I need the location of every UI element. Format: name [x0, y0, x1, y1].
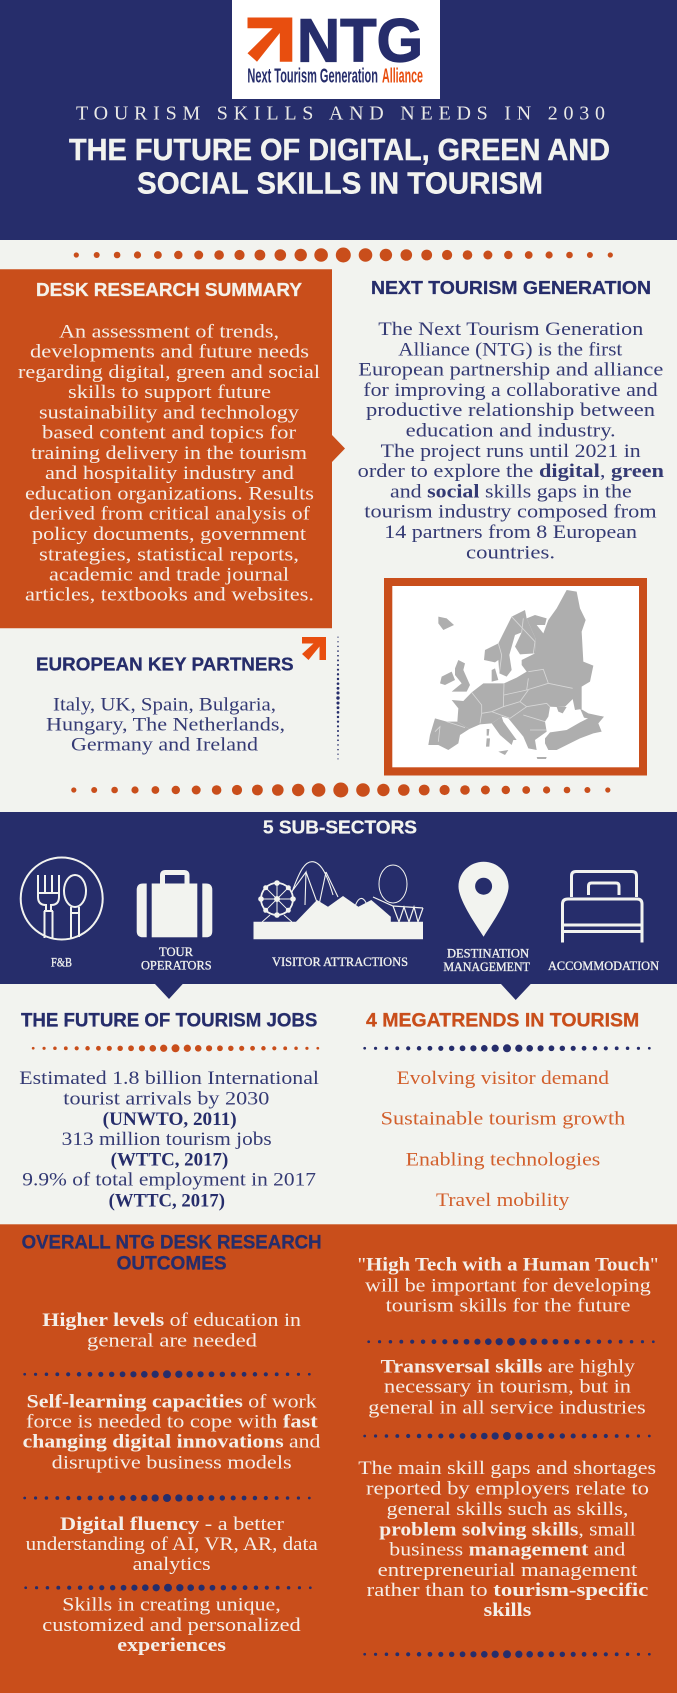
outcome: skill gaps: entrepreneurial management — [378, 1561, 638, 1581]
dot divider — [363, 1044, 651, 1052]
heading: OUTCOMES — [117, 1252, 227, 1274]
label: tour operators: TOUR — [159, 945, 194, 959]
text block: tourism industry composed from — [364, 503, 657, 523]
text block: Alliance (NTG) is the first — [398, 340, 623, 360]
outcome: self-learning: Self-learning capacities of work — [27, 1392, 318, 1412]
outcome: transversal skills: general in all service industries — [368, 1398, 646, 1418]
text block: (UNWTO, 2011) — [103, 1110, 237, 1130]
panel: 4 megatrends — [363, 1010, 651, 1211]
vertical dot divider — [336, 637, 340, 759]
outcome: transversal skills: Transversal skills are highly — [381, 1358, 636, 1378]
label: tour operators: OPERATORS — [141, 958, 212, 972]
text block: Estimated 1.8 billion International — [19, 1069, 319, 1089]
outcome: skill gaps: problem solving skills , small — [379, 1520, 636, 1540]
text block: education and industry. — [406, 422, 616, 442]
icon: location pin — [458, 862, 509, 937]
text block — [381, 1069, 625, 1211]
outcome: skill gaps: The main skill gaps and shortages — [358, 1459, 656, 1479]
text block: strategies, statistical reports, — [39, 545, 299, 565]
outcome: high tech: "High Tech with a Human Touch " — [358, 1256, 658, 1276]
central europe — [452, 672, 573, 750]
text block: Evolving visitor demand — [397, 1069, 610, 1089]
text block: 313 million tourism jobs — [62, 1130, 272, 1150]
label: visitor attractions: VISITOR ATTRACTIONS — [272, 955, 408, 969]
turkey — [545, 716, 604, 750]
outcome: unique skills: Skills in creating unique, — [62, 1596, 281, 1616]
panel: 5 sub-sectors — [0, 812, 677, 1000]
text block: Germany and Ireland — [71, 736, 259, 756]
text block — [358, 320, 665, 563]
panel: next tourism generation — [358, 277, 665, 563]
text block: and social skills gaps in the — [390, 482, 632, 502]
text block: productive relationship between — [366, 401, 655, 421]
outcome: skill gaps: business management and — [389, 1541, 626, 1561]
title: THE FUTURE OF DIGITAL, GREEN AND — [69, 133, 610, 167]
dot divider top — [74, 248, 613, 262]
panel: european key partners — [36, 637, 326, 756]
text block — [19, 1069, 319, 1212]
outcome: transversal skills: necessary in tourism, but in — [384, 1378, 631, 1398]
label: tour operators — [141, 945, 212, 972]
outcome: higher levels: general are needed — [87, 1332, 258, 1352]
subtitle: TOURISM SKILLS AND NEEDS IN 2030 — [76, 102, 605, 124]
heading: EUROPEAN KEY PARTNERS — [36, 654, 294, 675]
caucasus — [580, 708, 603, 720]
outcome: self-learning: disruptive business models — [52, 1453, 292, 1473]
denmark — [492, 668, 498, 682]
logo letters: NTG — [297, 7, 423, 75]
dot divider — [363, 1650, 651, 1658]
heading: DESK RESEARCH SUMMARY — [36, 279, 303, 300]
text block: sustainability and technology — [39, 403, 300, 423]
scandinavia — [484, 610, 527, 677]
dot divider middle — [71, 782, 610, 798]
icon: bed — [562, 872, 642, 942]
dot divider — [32, 1044, 319, 1052]
heading: 5 SUB-SECTORS — [263, 816, 417, 837]
text block: articles, textbooks and websites. — [25, 586, 314, 606]
outcome: high tech — [358, 1256, 658, 1317]
text block: for improving a collaborative and — [363, 381, 659, 401]
text block: developments and future needs — [30, 342, 309, 362]
text block: The Next Tourism Generation — [378, 320, 643, 340]
label: destination management — [443, 947, 530, 974]
dot divider — [23, 1370, 311, 1378]
heading: NEXT TOURISM GENERATION — [371, 277, 651, 298]
outcome: digital fluency: Digital fluency - a better — [60, 1515, 284, 1535]
heading — [22, 1231, 322, 1274]
text block: education organizations. Results — [25, 484, 314, 504]
italy — [492, 717, 517, 745]
finland — [515, 613, 535, 654]
iberia — [428, 718, 469, 750]
title — [69, 133, 610, 200]
outcome: unique skills: experiences — [117, 1636, 226, 1656]
heading: OVERALL NTG DESK RESEARCH — [22, 1231, 322, 1253]
text block: Travel mobility — [436, 1191, 570, 1211]
label: F&B: F&B — [51, 956, 72, 970]
logo tagline: Next Tourism Generation — [247, 66, 378, 88]
label: destination management: MANAGEMENT — [443, 960, 530, 974]
iceland — [438, 617, 454, 630]
dot divider — [363, 1432, 651, 1440]
icon: logo arrow — [248, 18, 292, 62]
text block: academic and trade journal — [49, 566, 289, 586]
text block: Italy, UK, Spain, Bulgaria, — [53, 696, 276, 716]
text block: 14 partners from 8 European — [384, 523, 637, 543]
text block: policy documents, government — [32, 525, 307, 545]
text block: skills to support future — [68, 383, 271, 403]
outcome: high tech: will be important for developing — [365, 1277, 651, 1297]
label: destination management: DESTINATION — [447, 947, 529, 961]
icon: amusement park — [254, 862, 423, 939]
text block: The project runs until 2021 in — [381, 442, 641, 462]
icon: suitcase — [137, 872, 212, 937]
icon: arrow — [302, 637, 326, 660]
outcome: skill gaps: reported by employers relate to — [366, 1479, 649, 1499]
outcome: unique skills: customized and personalized — [42, 1616, 302, 1636]
text block — [18, 322, 320, 606]
panel: map of Europe — [384, 578, 647, 776]
outcome: skill gaps — [358, 1459, 656, 1621]
logo — [232, 0, 440, 99]
britain — [452, 660, 470, 692]
label: accommodation: ACCOMMODATION — [548, 959, 659, 973]
sicily — [498, 750, 508, 755]
map — [428, 590, 604, 759]
heading: 4 MEGATRENDS IN TOURISM — [366, 1010, 639, 1032]
text block — [46, 696, 285, 756]
text block: (WTTC, 2017) — [109, 1192, 225, 1212]
outcome: skill gaps: skills — [484, 1601, 531, 1621]
outcome: digital fluency: analytics — [133, 1555, 211, 1575]
text block: and hospitality industry and — [45, 464, 295, 484]
panel: desk research summary — [0, 269, 345, 628]
text block: Enabling technologies — [406, 1151, 600, 1171]
outcome: self-learning — [23, 1392, 321, 1473]
text block: based content and topics for — [42, 424, 296, 444]
outcome: higher levels — [42, 1311, 301, 1352]
dot divider — [23, 1494, 311, 1502]
dot divider — [367, 1338, 655, 1346]
panel: header — [0, 0, 677, 240]
text block: Hungary, The Netherlands, — [46, 716, 285, 736]
text block: countries. — [466, 543, 555, 563]
crimea — [557, 707, 567, 713]
text block: Sustainable tourism growth — [381, 1109, 625, 1129]
panel: future of tourism jobs — [19, 1010, 319, 1212]
crete — [537, 757, 547, 759]
outcome: skill gaps: rather than to tourism-specific — [367, 1581, 648, 1601]
outcome: digital fluency: understanding of AI, VR, AR, data — [26, 1535, 318, 1555]
text block: tourist arrivals by 2030 — [63, 1089, 269, 1109]
corsica — [487, 729, 489, 736]
outcome: higher levels: Higher levels of education in — [42, 1311, 301, 1331]
outcome: high tech: tourism skills for the future — [386, 1297, 630, 1317]
outcome: self-learning: changing digital innovations and — [23, 1433, 321, 1453]
heading: THE FUTURE OF TOURISM JOBS — [21, 1010, 317, 1032]
ireland — [440, 672, 455, 685]
text block: 9.9% of total employment in 2017 — [22, 1171, 316, 1191]
sardinia — [486, 738, 490, 747]
logo tagline accent: Alliance — [382, 66, 423, 88]
outcome: digital fluency — [26, 1515, 318, 1575]
icon: fork and spoon — [21, 858, 103, 940]
text block: European partnership and alliance — [358, 361, 663, 381]
title: SOCIAL SKILLS IN TOURISM — [137, 166, 543, 200]
outcome: self-learning: force is needed to cope with fast — [26, 1413, 319, 1433]
text block: An assessment of trends, — [59, 322, 279, 342]
text block: order to explore the digital , green — [358, 462, 665, 482]
panel: overall outcomes — [0, 1224, 677, 1693]
text block: (WTTC, 2017) — [111, 1151, 228, 1171]
dot divider — [24, 1584, 312, 1592]
text block: derived from critical analysis of — [29, 505, 311, 525]
russia — [522, 590, 593, 710]
outcome: skill gaps: general skills such as skills, — [387, 1500, 628, 1520]
outcome: transversal skills — [368, 1358, 646, 1418]
outcome: unique skills — [42, 1596, 302, 1656]
text block: regarding digital, green and social — [18, 363, 320, 383]
text block: training delivery in the tourism — [31, 444, 308, 464]
